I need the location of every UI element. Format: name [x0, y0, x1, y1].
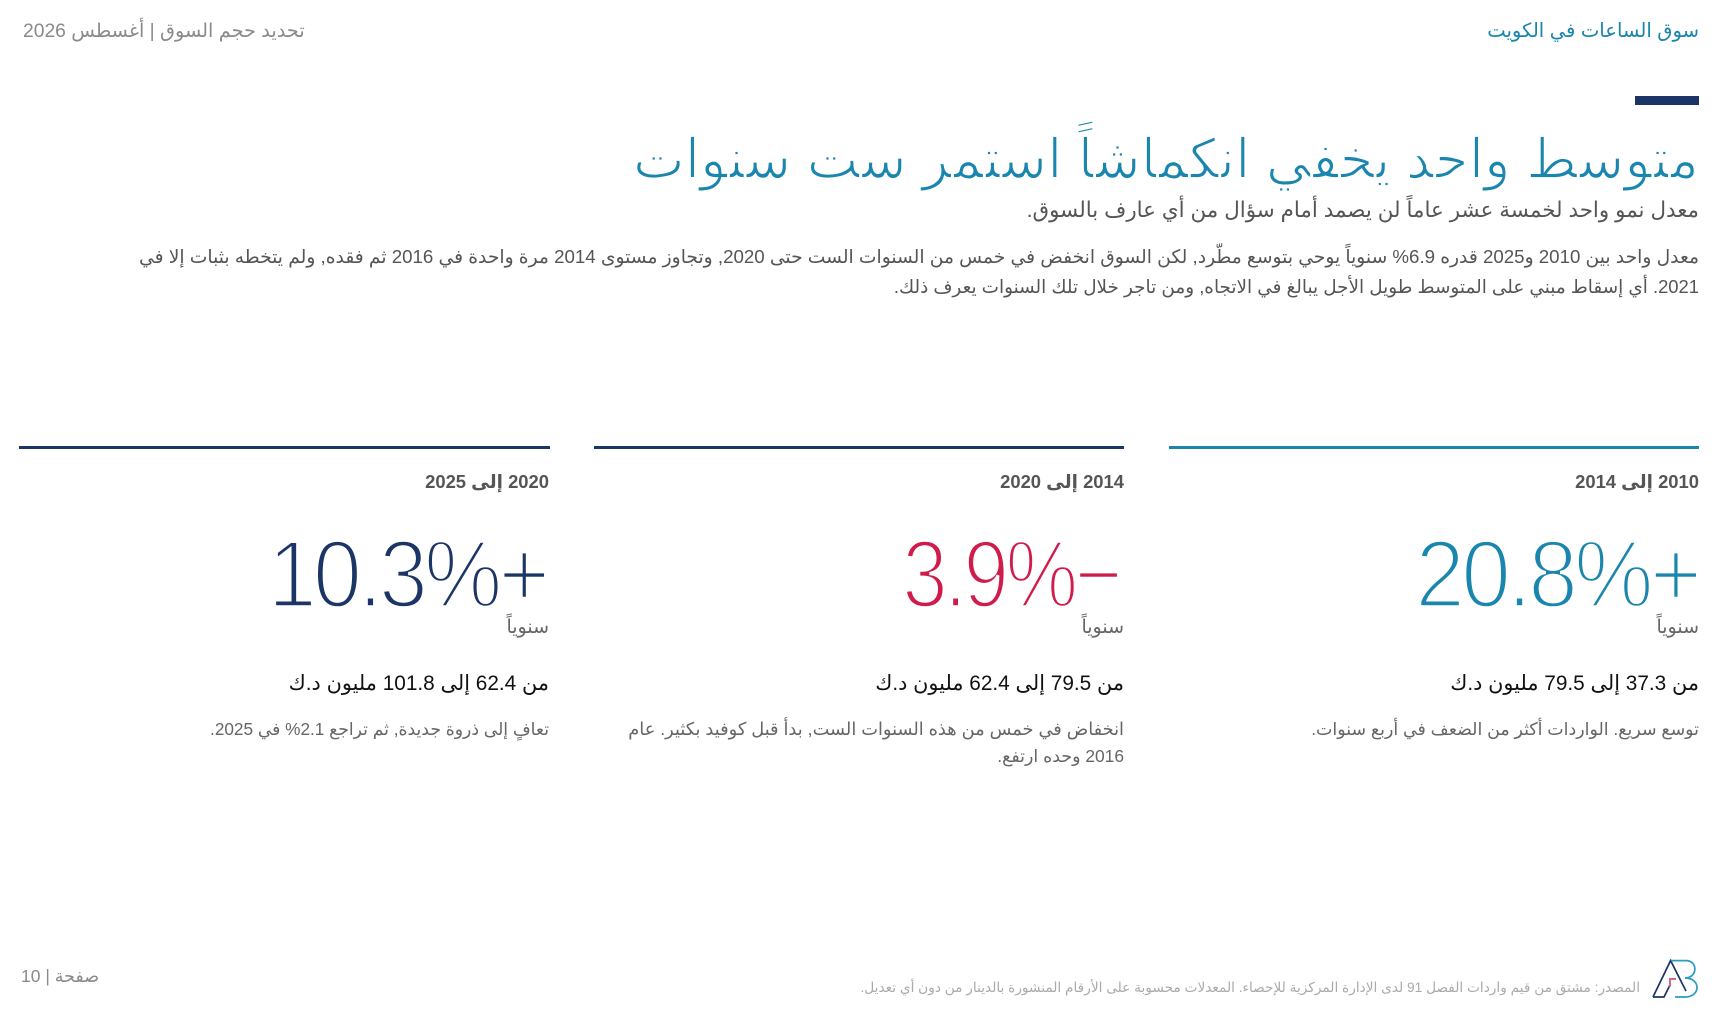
- icon: AB logo: [1652, 958, 1698, 998]
- description: توسع سريع. الواردات أكثر من الضعف في أربع سنوات.: [1311, 719, 1699, 739]
- growth figure: +10.3%: [268, 521, 546, 628]
- per year label: سنوياً: [506, 617, 549, 638]
- intro paragraph: معدل واحد بين 2010 و2025 قدره 6.9% سنوياً يوحي بتوسع مطّرد, لكن السوق انخفض في خمس من السنوات الست حتى 2020, وتجاوز مستوى 2014 مرة واحدة في 2016 ثم فقده, ولم يتخطه بثبات إلا في: [139, 246, 1699, 267]
- intro paragraph: [139, 243, 1699, 298]
- per year label: سنوياً: [1081, 617, 1124, 638]
- panel: 2014 to 2020: [594, 446, 1124, 766]
- panel rule: [594, 446, 1124, 448]
- period label: 2020 إلى 2025: [425, 471, 549, 492]
- panel rule: [19, 446, 550, 448]
- value range: من 79.5 إلى 62.4 مليون د.ك: [875, 672, 1124, 695]
- source note: المصدر: مشتق من قيم واردات الفصل 91 لدى الإدارة المركزية للإحصاء. المعدلات محسوبة على الأرقام المنشورة بالدينار من دون أي تعديل.: [860, 980, 1640, 995]
- panel: 2010 to 2014: [1169, 446, 1699, 740]
- header: update date: تحديد حجم السوق | أغسطس 2026: [23, 21, 305, 42]
- panel: 2020 to 2025: [19, 446, 550, 741]
- description: تعافٍ إلى ذروة جديدة, ثم تراجع 2.1% في 2025.: [210, 719, 549, 739]
- value range: من 37.3 إلى 79.5 مليون د.ك: [1450, 672, 1699, 695]
- panel rule: [1169, 446, 1699, 448]
- per year label: سنوياً: [1656, 617, 1699, 638]
- period label: 2010 إلى 2014: [1575, 471, 1699, 492]
- decline figure: −3.9%: [902, 521, 1119, 628]
- intro paragraph: 2021. أي إسقاط مبني على المتوسط طويل الأجل يبالغ في الاتجاه, ومن تاجر خلال تلك السنوات يعرف ذلك.: [894, 276, 1699, 297]
- description: انخفاض في خمس من هذه السنوات الست, بدأ قبل كوفيد بكثير. عام: [628, 719, 1124, 739]
- header: report name: سوق الساعات في الكويت: [1487, 20, 1699, 42]
- period label: 2014 إلى 2020: [1000, 471, 1124, 492]
- accent bar: [1635, 96, 1699, 105]
- description: 2016 وحده ارتفع.: [997, 746, 1124, 766]
- title: متوسط واحد يخفي انكماشاً استمر ست سنوات: [633, 128, 1699, 190]
- growth figure: +20.8%: [1415, 521, 1698, 628]
- value range: من 62.4 إلى 101.8 مليون د.ك: [289, 672, 549, 695]
- description: [628, 717, 1124, 766]
- subtitle: معدل نمو واحد لخمسة عشر عاماً لن يصمد أمام سؤال من أي عارف بالسوق.: [1027, 198, 1699, 222]
- page number: صفحة | 10: [21, 966, 99, 986]
